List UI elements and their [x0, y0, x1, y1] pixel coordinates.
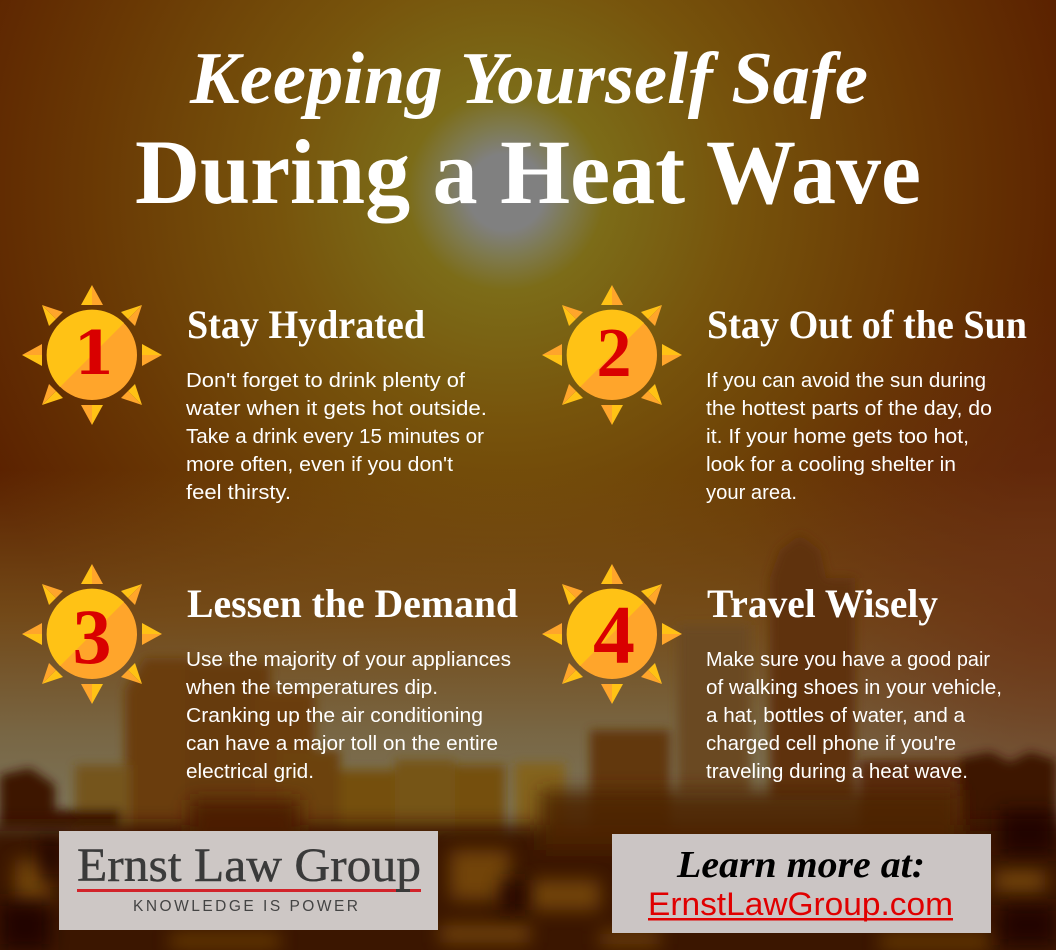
body text: lessen the demand: can have a major toll on the entire — [186, 733, 498, 755]
heading: travel wisely: Travel Wisely — [707, 581, 938, 626]
body text: travel wisely — [706, 649, 1002, 783]
panel: tip 1 stay hydrated — [22, 285, 487, 504]
logo panel: ernst law group — [59, 831, 438, 930]
body text: lessen the demand: electrical grid. — [186, 761, 314, 783]
body text: travel wisely: of walking shoes in your vehicle, — [706, 677, 1002, 699]
body text: travel wisely: Make sure you have a good pair — [706, 649, 990, 671]
body text: stay out of the sun: If you can avoid the sun during — [706, 370, 986, 392]
icon: sun number 3: 3 — [72, 593, 112, 680]
body text: lessen the demand: Use the majority of your appliances — [186, 649, 511, 671]
title: During a Heat Wave — [135, 121, 921, 223]
body text: stay out of the sun: the hottest parts of the day, do — [706, 398, 992, 420]
icon: sun number 4 — [542, 564, 682, 704]
body text: stay hydrated: water when it gets hot outside. — [185, 398, 487, 420]
body text: travel wisely: a hat, bottles of water, and a — [706, 705, 966, 727]
title — [135, 38, 921, 223]
body text: stay hydrated: more often, even if you don't — [186, 454, 453, 476]
heading: stay hydrated: Stay Hydrated — [187, 302, 425, 347]
icon: sun number 2 — [542, 285, 682, 425]
body text: travel wisely: traveling during a heat wave. — [706, 761, 968, 783]
icon: sun number 3 — [22, 564, 162, 704]
body text: stay hydrated: Don't forget to drink plenty of — [186, 370, 465, 392]
call to action panel: learn more: Learn more at: — [676, 844, 925, 886]
body text: stay hydrated: Take a drink every 15 minutes or — [186, 426, 484, 448]
body text: lessen the demand — [185, 649, 511, 783]
icon: sun number 1 — [22, 285, 162, 425]
logo panel: ernst law group: KNOWLEDGE IS POWER — [133, 898, 358, 915]
call to action panel: learn more — [612, 834, 991, 933]
body text: lessen the demand: when the temperatures dip. — [185, 677, 438, 699]
title: Keeping Yourself Safe — [189, 38, 868, 120]
heading: lessen the demand: Lessen the Demand — [187, 581, 518, 626]
body text: lessen the demand: Cranking up the air conditioning — [186, 705, 483, 727]
panel: tip 2 stay out of the sun — [542, 285, 1027, 504]
logo panel: ernst law group: Ernst Law Group — [77, 839, 421, 892]
body text: stay hydrated — [185, 370, 487, 504]
heading: stay out of the sun: Stay Out of the Sun — [707, 302, 1027, 347]
body text: travel wisely: charged cell phone if you're — [706, 733, 956, 755]
icon: sun number 4: 4 — [593, 589, 635, 682]
body text: stay hydrated: feel thirsty. — [186, 482, 291, 504]
body text: stay out of the sun: your area. — [706, 482, 797, 504]
body text: stay out of the sun: look for a cooling shelter in — [706, 454, 956, 476]
icon: sun number 2: 2 — [596, 315, 632, 392]
panel: tip 4 travel wisely — [542, 564, 1002, 783]
body text: stay out of the sun: it. If your home gets too hot, — [706, 426, 969, 448]
panel: tip 3 lessen the demand — [22, 564, 518, 783]
body text: stay out of the sun — [706, 370, 992, 504]
call to action panel: learn more: ErnstLawGroup.com — [648, 886, 953, 922]
icon: sun number 1: 1 — [73, 319, 115, 389]
